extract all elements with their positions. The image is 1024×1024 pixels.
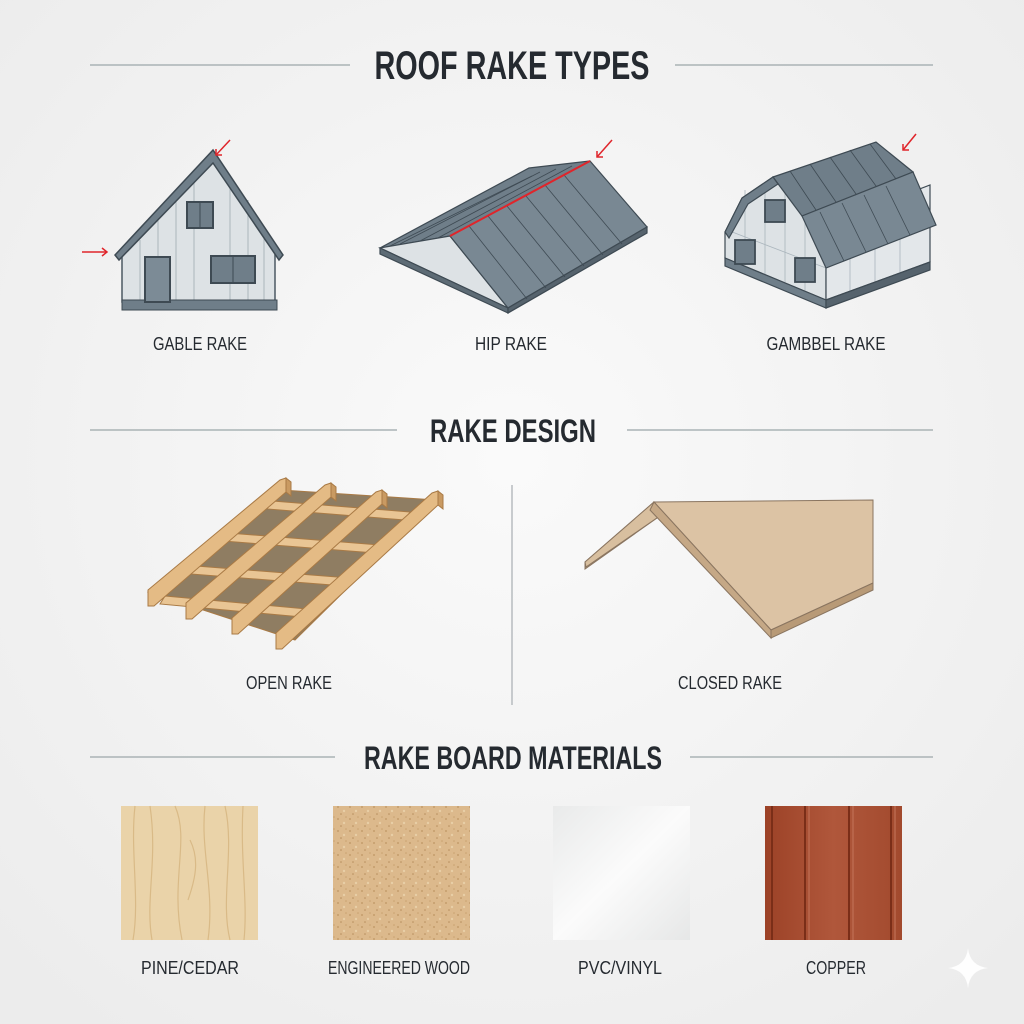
swatch: copper (765, 806, 902, 940)
label: engineered wood: ENGINEERED WOOD (328, 958, 470, 978)
arrow: gambrel ridge (903, 134, 916, 150)
icon: hip roof (380, 161, 647, 313)
label: gable rake: GABLE RAKE (153, 334, 247, 354)
icon: open rake frame (148, 478, 443, 649)
swatch: pvc/vinyl (553, 806, 690, 940)
icon: closed rake (585, 500, 873, 638)
label: pine/cedar: PINE/CEDAR (141, 958, 239, 978)
swatch: pine/cedar (121, 806, 258, 940)
label: gambrel rake: GAMBBEL RAKE (766, 334, 886, 354)
icon: gambrel barn (725, 142, 936, 308)
label: open rake: OPEN RAKE (246, 673, 332, 693)
icon: sparkle (948, 948, 988, 988)
arrow: gable eave (82, 248, 107, 256)
label: pvc/vinyl: PVC/VINYL (578, 958, 662, 978)
swatch: engineered wood (333, 806, 470, 940)
arrow: hip ridge (597, 140, 612, 157)
heading: rake board materials: RAKE BOARD MATERIALS (364, 740, 662, 776)
heading: rake design: RAKE DESIGN (430, 413, 596, 449)
label: closed rake: CLOSED RAKE (678, 673, 782, 693)
arrow: gable apex (216, 140, 230, 155)
title: roof rake types: ROOF RAKE TYPES (374, 44, 650, 88)
icon: gable house (115, 150, 283, 310)
label: hip rake: HIP RAKE (475, 334, 547, 354)
label: copper: COPPER (806, 958, 866, 978)
